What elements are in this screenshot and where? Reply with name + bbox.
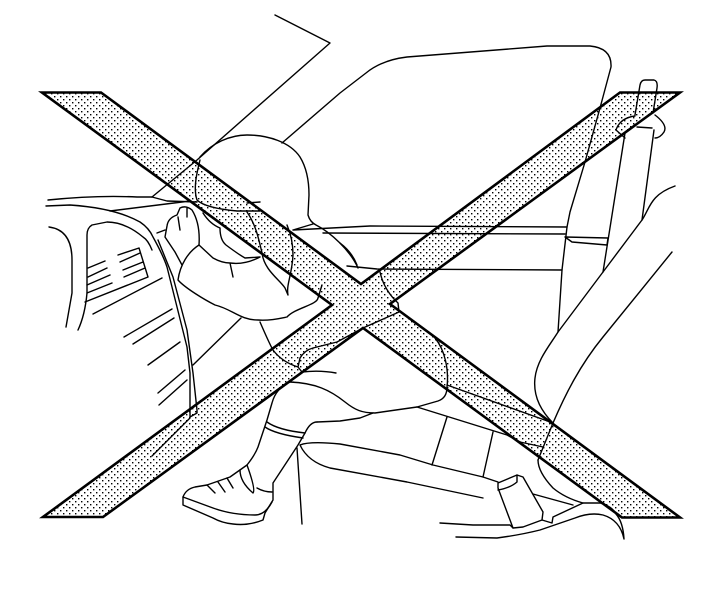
child head xyxy=(200,135,358,268)
dashboard edge and pillar trim xyxy=(46,205,197,417)
sock band xyxy=(265,422,305,438)
shoulder belt xyxy=(603,127,654,272)
belt buckle xyxy=(498,475,543,528)
seat post xyxy=(297,448,302,524)
sleeve cuff and ruffle xyxy=(199,213,260,277)
steering wheel edge xyxy=(49,227,72,327)
child leg and shoe xyxy=(183,382,317,524)
prohibition X band xyxy=(42,92,680,518)
console lines xyxy=(93,278,241,456)
seat back front xyxy=(535,186,675,423)
seat back xyxy=(538,252,672,460)
child thigh xyxy=(290,338,448,413)
seat belt lap xyxy=(417,385,553,477)
seat side xyxy=(533,460,583,505)
vent panel xyxy=(85,248,148,302)
door sill lines xyxy=(293,224,608,270)
windshield pillar xyxy=(152,15,330,197)
instrument cluster xyxy=(78,222,152,330)
dashboard top xyxy=(48,196,197,211)
torso edge through band xyxy=(340,243,399,328)
belt anchor xyxy=(616,80,665,138)
child waist xyxy=(260,322,363,373)
hood and hair xyxy=(247,212,293,295)
child sleeve xyxy=(178,245,322,320)
shoe laces and collar xyxy=(207,465,272,493)
seat base xyxy=(440,503,624,539)
thigh underside xyxy=(317,413,373,422)
head lower edge xyxy=(195,160,260,211)
seat cushion xyxy=(300,443,498,498)
line drawing xyxy=(46,15,675,539)
roof and door frame xyxy=(282,46,611,332)
shoe sole xyxy=(183,497,272,515)
child hand xyxy=(165,207,199,265)
